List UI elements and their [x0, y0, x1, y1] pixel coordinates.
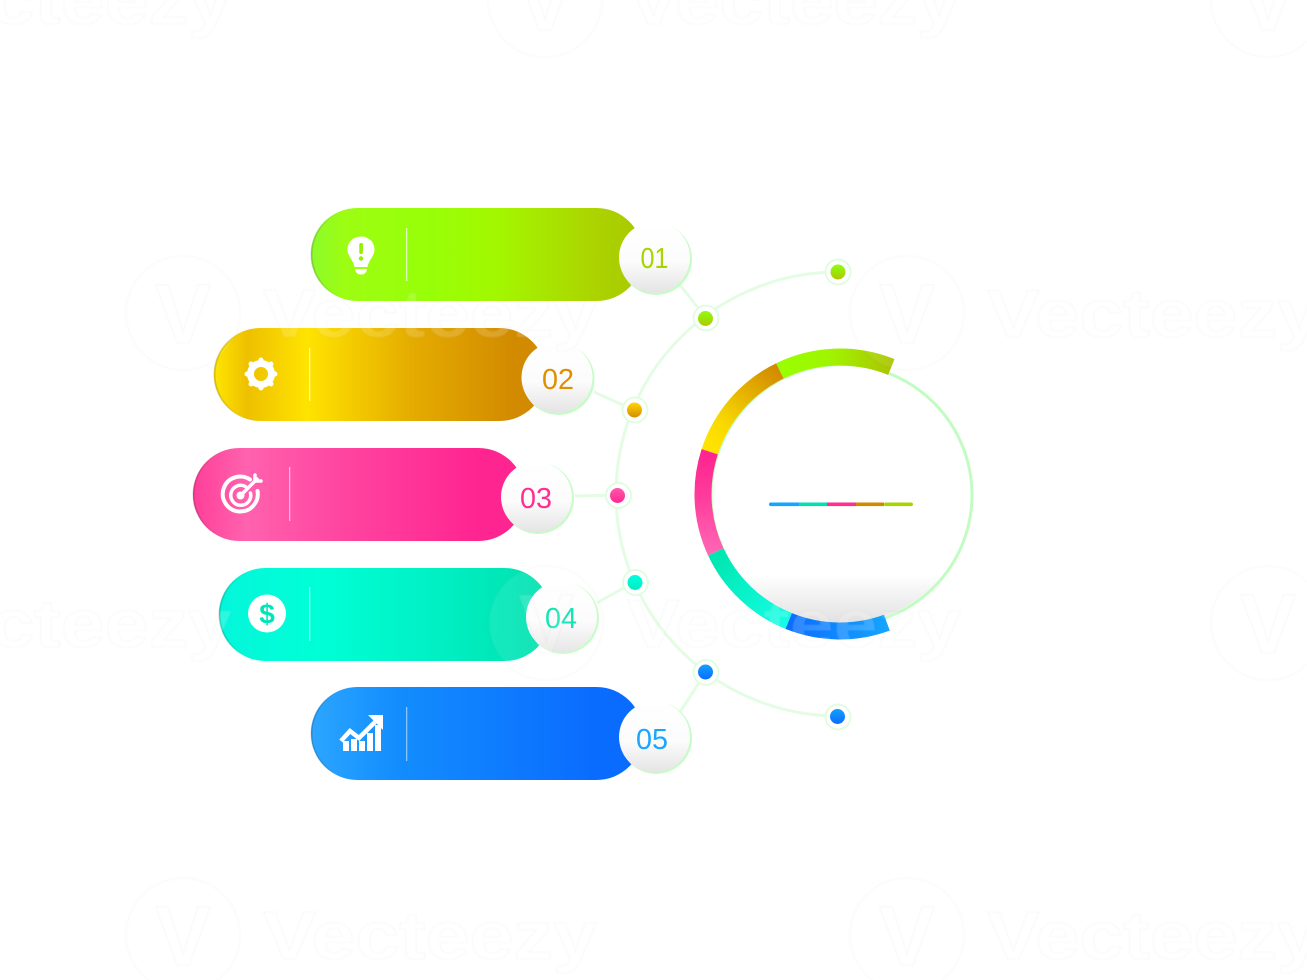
step 4 bar: [219, 568, 551, 661]
centre circle: [711, 364, 972, 626]
watermark: Vecteezy: [627, 586, 961, 662]
number badge 02: [522, 342, 594, 415]
step 5 bar: [311, 687, 643, 780]
watermark: V: [518, 577, 574, 671]
watermark: V: [155, 267, 211, 361]
icon: dollar: [248, 594, 286, 632]
number badge 03: 03: [520, 483, 552, 515]
number badge 04: 04: [545, 603, 577, 635]
step 1 bar: [311, 208, 643, 301]
icon: gear: [247, 360, 275, 388]
number badge 01: [619, 222, 692, 295]
step 2 bar: [214, 328, 546, 421]
icon: dollar: $: [259, 598, 275, 630]
watermark: Vecteezy: [263, 276, 597, 352]
watermark: V: [1240, 577, 1296, 671]
icon: target: [223, 475, 261, 512]
step 3 bar: [193, 448, 525, 541]
number badge 05: 05: [636, 724, 668, 756]
icon: light bulb: [348, 236, 374, 274]
number badge 01: 01: [640, 243, 668, 275]
watermark: V: [879, 267, 935, 361]
watermark: Vecteezy: [987, 898, 1307, 974]
arc nodes: [606, 260, 850, 730]
watermark: Vecteezy: [987, 276, 1307, 352]
watermark: Vecteezy: [263, 898, 597, 974]
ring segments: [703, 357, 891, 631]
number badge 03: [501, 462, 574, 534]
number badge 05: [619, 702, 692, 774]
number badge 04: [526, 582, 599, 654]
icon: growth chart: [341, 715, 383, 751]
centre divider line: [769, 502, 913, 506]
number badge 02: 02: [542, 364, 574, 396]
connector arc: [575, 272, 838, 716]
